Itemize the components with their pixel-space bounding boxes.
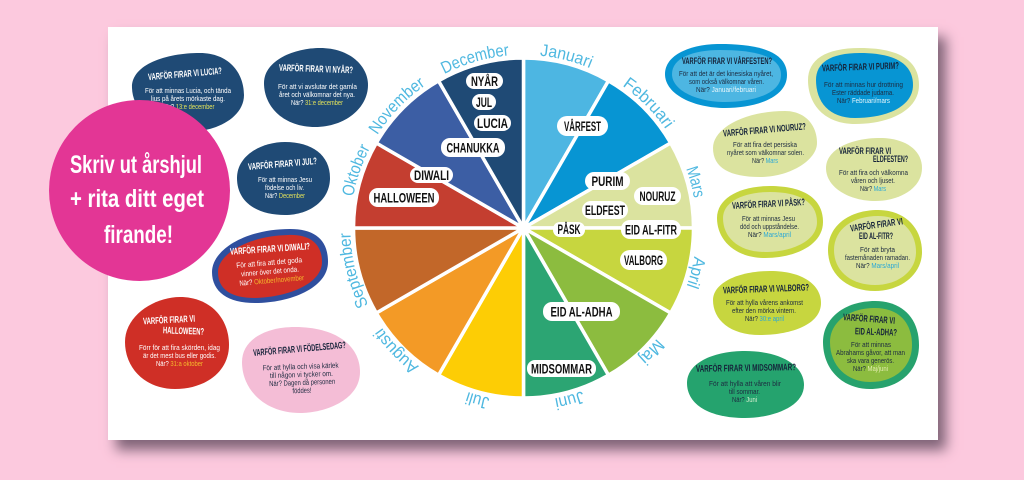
bubble: Eldfesten: ELDFESTEN? (873, 154, 908, 165)
bubble: Nouruz: VARFÖR FIRAR VI NOURUZ? (723, 121, 806, 140)
slice: January (524, 58, 608, 228)
bubble: Nouruz: För att fira det persiska (733, 140, 798, 149)
pill: NOURUZ (634, 187, 681, 205)
bubble: Diwali: För att fira att det goda (236, 255, 303, 270)
bubble: Eid al-Fitr: När? Mars/april (856, 261, 899, 270)
bubble: Nyår: året och välkomnar det nya. (279, 90, 355, 99)
month: Mars: Mars (686, 166, 702, 198)
bubble: Halloween (125, 297, 229, 389)
pill: VÅRFEST (557, 116, 608, 136)
pill: CHANUKKA (441, 138, 505, 157)
bubble: Påsk: död och uppståndelse. (740, 222, 799, 231)
bubble: Midsommar: till sommar. (729, 387, 760, 396)
bubble: Lucia (132, 53, 244, 131)
slice: June (524, 228, 608, 398)
month: Oktober: Oktober (342, 144, 369, 195)
pink callout circle: firande! (104, 221, 173, 249)
pill: NOURUZ: NOURUZ (640, 189, 676, 204)
pill: CHANUKKA: CHANUKKA (446, 140, 500, 156)
pill: PÅSK: PÅSK (558, 222, 581, 237)
bubble: Diwali: vinner över det onda. (241, 264, 299, 279)
bubble: Nyår (264, 48, 368, 127)
bubble: Eid al-Adha: ska vara generös. (847, 356, 894, 365)
pill: PURIM (585, 172, 630, 190)
slice: August (376, 228, 524, 375)
bubble: Purim: För att minnas hur drottning (824, 80, 903, 89)
bubble: Jul: När? December (265, 191, 305, 200)
month: Februari: Februari (623, 77, 676, 128)
pill: JUL: JUL (476, 95, 492, 110)
bubble: Eid al-Fitr: fastemånaden ramadan. (845, 253, 910, 262)
month: April: April (687, 256, 705, 290)
bubble: Vårfesten: För att det är det kinesiska nyåret, (679, 69, 773, 78)
bubble: Halloween: VARFÖR FIRAR VI (143, 314, 195, 327)
month: December: December (440, 46, 508, 74)
bubble: Midsommar (687, 351, 804, 418)
pill: VALBORG: VALBORG (624, 253, 663, 268)
pill: ELDFEST (582, 201, 628, 219)
bubble: Födelsedag: föddes! (292, 386, 312, 395)
bubble: Midsommar: För att hylla att våren blir (709, 379, 781, 388)
bubble: Nyår: VARFÖR FIRAR VI NYÅR? (279, 63, 353, 76)
bubble: Födelsedag: till någon vi tycker om. (270, 369, 333, 380)
bubble: Vårfesten: som också välkomnar våren. (689, 77, 764, 86)
pink callout circle (49, 100, 230, 281)
bubble: Eldfesten: våren och ljuset. (851, 176, 895, 185)
pill: VALBORG (620, 250, 667, 270)
pill: HALLOWEEN (369, 188, 439, 207)
pill: DIWALI: DIWALI (414, 168, 449, 183)
bubble: Purim: VARFÖR FIRAR VI PURIM? (822, 61, 899, 74)
bubble: Halloween: Förr för att fira skörden, idag (139, 343, 220, 352)
month labels (340, 44, 705, 410)
bubble: Eid al-Adha: EID AL-ADHA? (855, 326, 897, 339)
bubble: Födelsedag: När? Dagen då personen (269, 377, 335, 388)
slice: September (354, 228, 524, 313)
month: September: September (340, 234, 367, 308)
bubble: Påsk (717, 186, 823, 258)
pill: EID AL-ADHA: EID AL-ADHA (550, 304, 613, 320)
pill: EID AL-FITR: EID AL-FITR (625, 222, 677, 238)
pill: MIDSOMMAR: MIDSOMMAR (531, 362, 592, 376)
white card with shadow (108, 27, 938, 440)
pill: ELDFEST: ELDFEST (585, 203, 625, 218)
bubble: Påsk: När? Mars/april (748, 230, 791, 239)
bubble: Lucia: VARFÖR FIRAR VI LUCIA? (148, 66, 222, 83)
bubble: Eid al-Adha: Abrahams gåvor, att man (836, 348, 905, 357)
slice: December (438, 58, 524, 228)
bubble: Valborg: När? 30:e april (745, 314, 784, 323)
pink callout circle: Skriv ut årshjul (70, 151, 202, 179)
bubble: Nouruz (713, 111, 817, 177)
bubble: Lucia: När? 13:e december (162, 102, 215, 111)
bubble: Valborg: efter den mörka vintern. (732, 306, 796, 315)
bubble: Valborg (713, 271, 821, 335)
month: Januari: Januari (540, 44, 594, 68)
slice: May (524, 228, 671, 375)
bubble: Purim: Ester räddade judarna. (832, 88, 894, 97)
month: Augusti: Augusti (372, 328, 419, 372)
bubble: Jul: VARFÖR FIRAR VI JUL? (248, 156, 318, 173)
bubble: Jul (237, 142, 330, 215)
bubble: Eldfesten (826, 138, 922, 201)
bubble: Valborg: För att hylla vårens ankomst (726, 298, 804, 307)
bubble: Nouruz: nyåret som välkomnar solen. (727, 148, 804, 157)
bubble: Eid al-Fitr: VARFÖR FIRAR VI (850, 216, 904, 235)
bubble: Diwali: VARFÖR FIRAR VI DIWALI? (230, 241, 310, 258)
bubble: Födelsedag (242, 327, 360, 413)
bubble: Eid al-Adha (823, 301, 919, 389)
pill: EID AL-ADHA (543, 302, 620, 321)
pill: LUCIA: LUCIA (477, 116, 508, 131)
slice: October (354, 143, 524, 228)
month: Juli: Juli (464, 392, 489, 409)
bubble: Eid al-Adha: När? Maj/juni (853, 364, 888, 373)
bubble: Nouruz: När? Mars (752, 156, 778, 165)
bubble: Purim: När? Februari/mars (837, 96, 890, 105)
slice: November (376, 81, 524, 228)
pill: EID AL-FITR (621, 220, 681, 239)
year wheel (354, 58, 694, 398)
bubble: Purim (808, 48, 919, 124)
bubble: Eid al-Adha: VARFÖR FIRAR VI (843, 312, 895, 327)
month: Juni: Juni (555, 392, 583, 410)
bubble: Eldfesten: För att fira och välkomna (839, 168, 909, 177)
bubble: Lucia: ljus på årets mörkaste dag. (151, 94, 225, 103)
bubble: Eid al-Adha: För att minnas (851, 340, 891, 349)
bubble: Diwali: När? Oktober/november (239, 273, 305, 288)
bubble: Eldfesten: När? Mars (860, 184, 886, 193)
bubble: Midsommar: När? Juni (732, 395, 757, 404)
pill: NYÅR (466, 73, 503, 89)
bubble: Halloween: är det mest bus eller godis. (143, 351, 216, 360)
bubble: Midsommar: VARFÖR FIRAR VI MIDSOMMAR? (696, 362, 796, 375)
bubble: Födelsedag: VARFÖR FIRAR VI FÖDELSEDAG? (253, 340, 346, 359)
pink callout circle: + rita ditt eget (70, 185, 205, 213)
bubble: Eid al-Fitr (828, 210, 922, 291)
bubble: Lucia: För att minnas Lucia, och tända (145, 86, 232, 95)
bubble: Eid al-Fitr: För att bryta (860, 245, 896, 254)
slice: July (438, 228, 524, 398)
bubble: Födelsedag: För att hylla och visa kärlek (262, 361, 339, 372)
bubble: Påsk: VARFÖR FIRAR VI PÅSK? (732, 197, 805, 212)
pill: JUL (472, 94, 496, 110)
slice: February (524, 81, 671, 228)
bubble: Jul: För att minnas Jesu (258, 175, 312, 184)
bubble: Nyår: För att vi avslutar det gamla (278, 82, 358, 91)
bubble: Halloween: HALLOWEEN? (163, 325, 204, 338)
bubble: Diwali (212, 229, 328, 303)
bubble: Halloween: När? 31:a oktober (156, 359, 203, 368)
bubble: Eldfesten: VARFÖR FIRAR VI (839, 146, 891, 157)
slice: March (524, 143, 694, 228)
bubble: Vårfesten: När? Januari/februari (696, 85, 756, 94)
month: November: November (368, 78, 424, 134)
pill: NYÅR: NYÅR (471, 74, 498, 89)
bubble: Påsk: För att minnas Jesu (742, 214, 795, 223)
slice: April (524, 228, 694, 313)
pill: PÅSK (553, 222, 585, 237)
bubble: Vårfesten: VARFÖR FIRAR VI VÅRFESTEN? (682, 56, 772, 67)
pill: HALLOWEEN: HALLOWEEN (374, 190, 434, 206)
pill: VÅRFEST: VÅRFEST (564, 119, 601, 134)
bubble: Nyår: När? 31:e december (291, 98, 343, 107)
pill: MIDSOMMAR (527, 360, 596, 377)
holiday pills (369, 73, 681, 377)
bubble: Vårfesten (665, 44, 787, 108)
bubble: Jul: födelse och liv. (265, 183, 304, 192)
bubble: Valborg: VARFÖR FIRAR VI VALBORG? (723, 282, 809, 296)
pill: PURIM: PURIM (592, 174, 624, 189)
bubble: Eid al-Fitr: EID AL-FITR? (859, 231, 893, 242)
month: Maj: Maj (638, 339, 665, 366)
